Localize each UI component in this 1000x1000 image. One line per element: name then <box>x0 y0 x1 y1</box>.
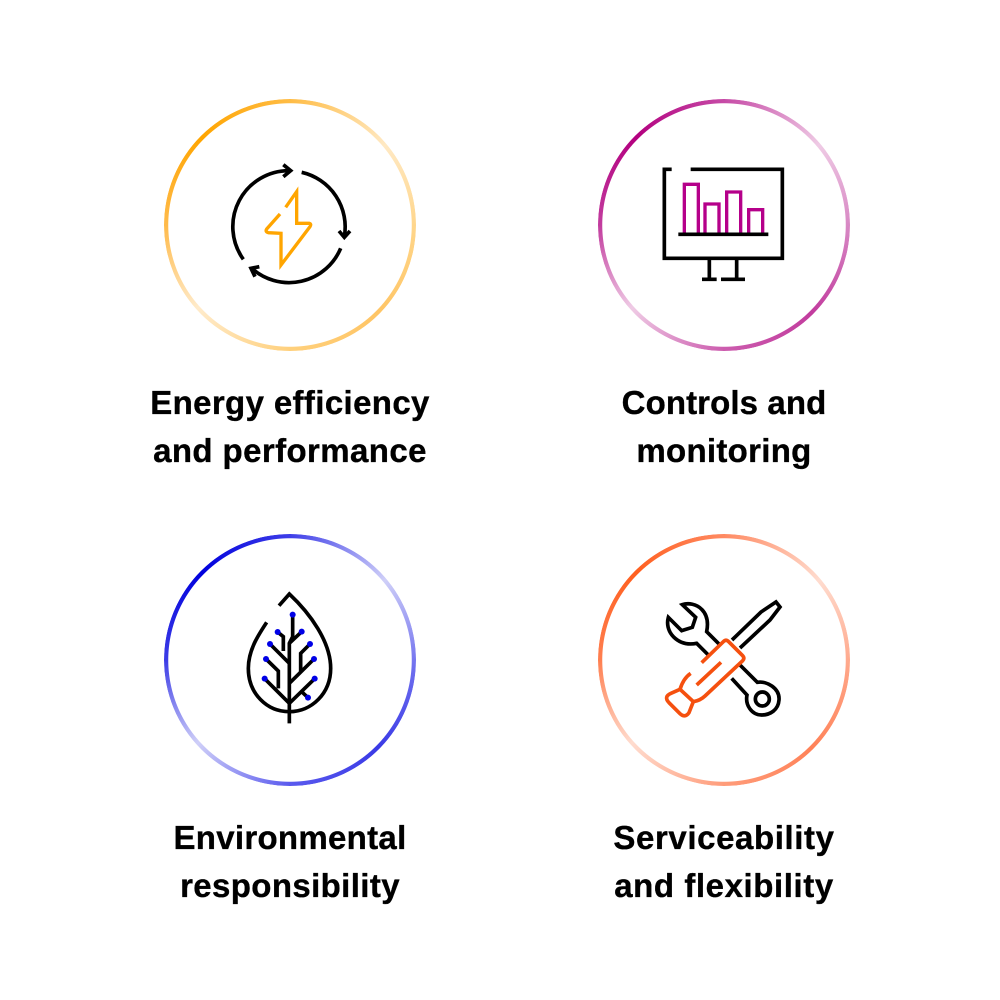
heading: serviceability and flexibility: Serviceability <box>613 819 835 856</box>
heading: energy efficiency and performance: Energy efficiency <box>150 384 430 421</box>
panel: controls and monitoring <box>598 99 850 470</box>
ring: blue gradient <box>164 534 416 786</box>
heading: energy efficiency and performance: and performance <box>153 432 427 469</box>
heading: environmental responsibility: responsibility <box>180 867 400 904</box>
panel: environmental responsibility <box>164 534 416 904</box>
heading: serviceability and flexibility: and flexibility <box>614 867 834 904</box>
icon: recycling arrows with lightning bolt <box>230 163 352 284</box>
heading: environmental responsibility <box>173 819 407 904</box>
heading: energy efficiency and performance <box>150 384 430 470</box>
heading: environmental responsibility: Environmental <box>173 819 407 856</box>
panel: serviceability and flexibility <box>598 534 850 904</box>
ring: magenta gradient <box>598 98 850 350</box>
icon: wrench and screwdriver <box>664 600 782 718</box>
ring: orange gradient <box>598 534 850 786</box>
heading: serviceability and flexibility <box>613 819 835 904</box>
ring: amber gradient <box>164 98 416 350</box>
heading: controls and monitoring <box>622 384 826 470</box>
heading: controls and monitoring: monitoring <box>636 432 812 469</box>
heading: controls and monitoring: Controls and <box>622 384 826 421</box>
icon: monitor with bar chart <box>662 168 784 282</box>
icon: circuit leaf <box>246 591 332 724</box>
panel: energy efficiency and performance <box>150 99 430 470</box>
